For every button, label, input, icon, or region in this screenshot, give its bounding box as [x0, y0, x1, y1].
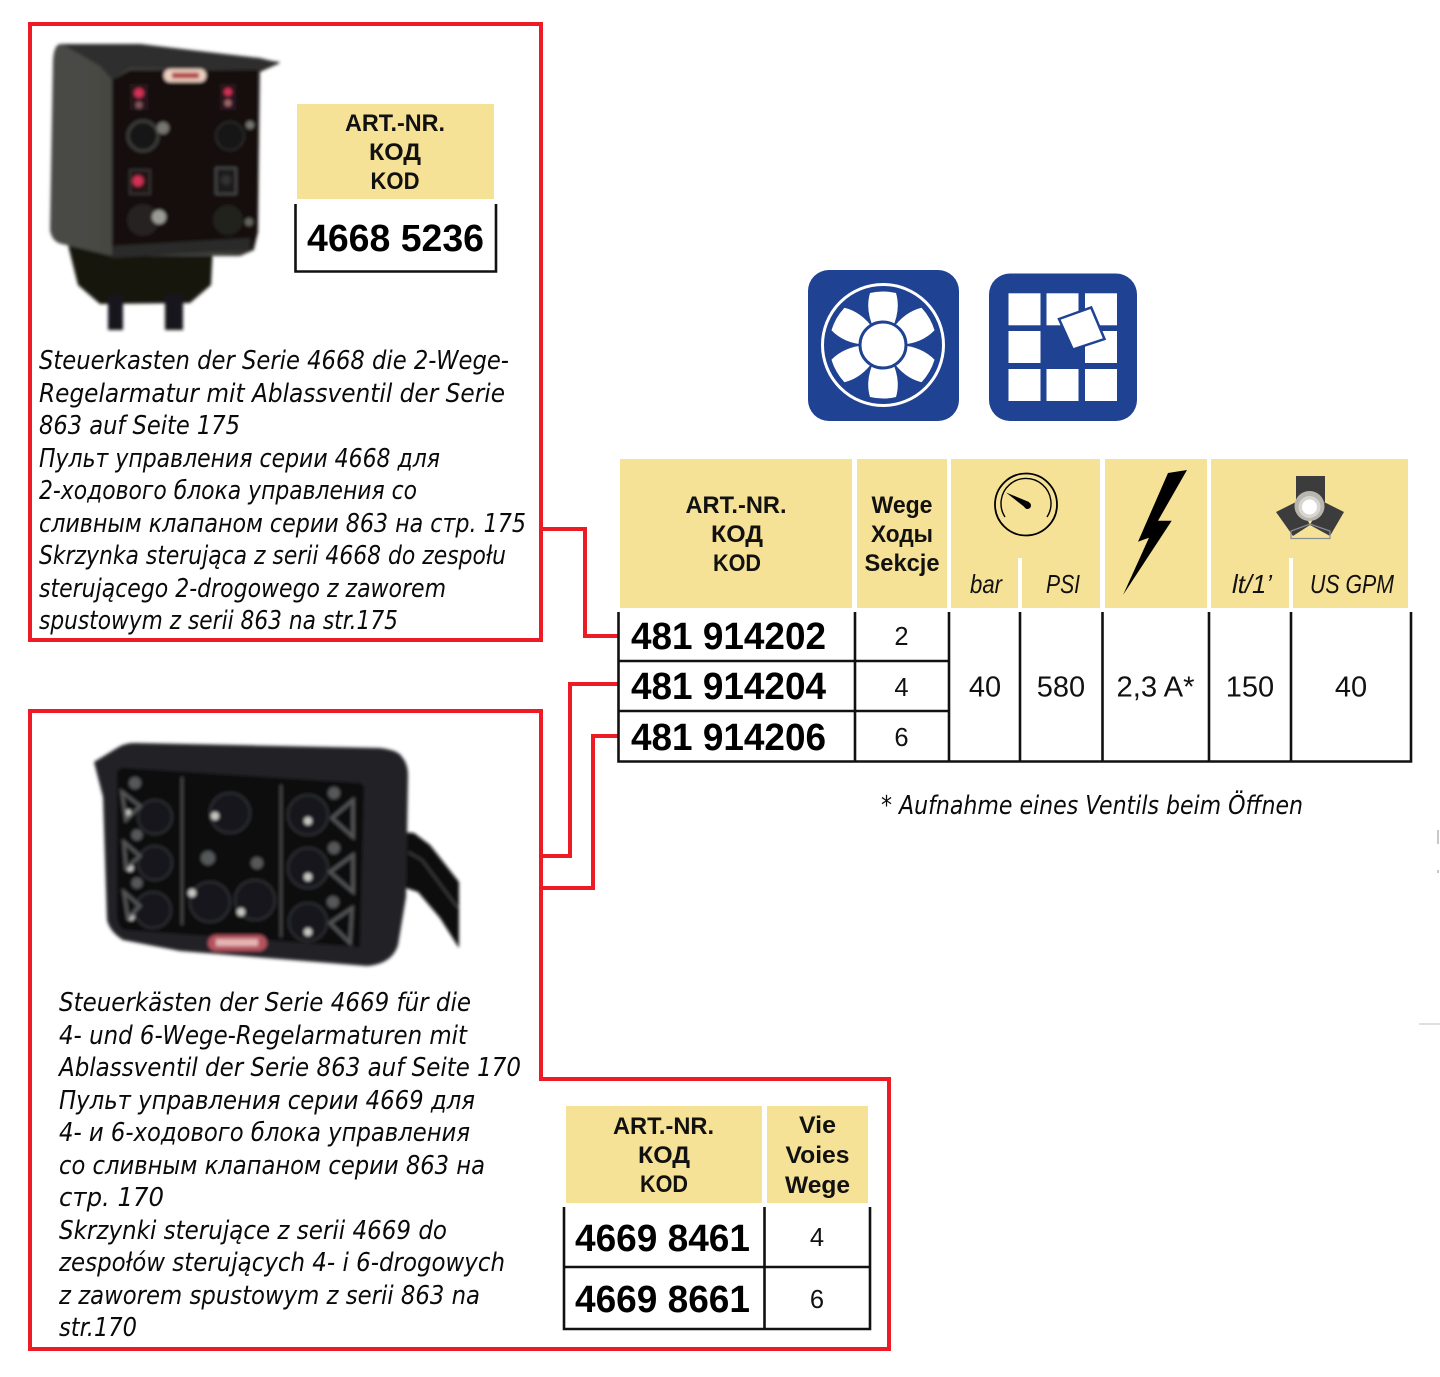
header: pressure: bar [970, 569, 1003, 599]
photo: control box 4669 [94, 743, 459, 966]
row 481 914206: 6 [894, 724, 909, 752]
description 4668 [39, 346, 526, 636]
row 4669 8461: 4669 8461 [575, 1218, 750, 1260]
header: flow [1211, 459, 1408, 608]
header: article code: КОД [638, 1142, 691, 1169]
table: 481 article codes [618, 459, 1411, 762]
header: article code [620, 459, 852, 608]
article code value 4668 [296, 204, 496, 272]
merged values: 580 [1037, 672, 1085, 704]
icon: pump [1276, 476, 1344, 538]
header: ways: Sekcje [864, 550, 940, 577]
header: ways: Vie [799, 1112, 836, 1139]
description 4668: сливным клапаном серии 863 на стр. 175 [39, 509, 526, 539]
description 4668: Steuerkasten der Serie 4668 die 2-Wege- [39, 346, 509, 376]
header: pressure: PSI [1046, 569, 1080, 599]
icon: fan [808, 270, 959, 421]
row 481 914202: 481 914202 [631, 616, 826, 658]
panel border 4669 [30, 711, 889, 1349]
description 4669: со сливным клапаном серии 863 на [59, 1151, 485, 1181]
row 481 914206: 481 914206 [631, 717, 826, 759]
description 4668: sterującego 2-drogowego z zaworem [39, 574, 446, 604]
description 4669: 4- и 6-ходового блока управления [59, 1118, 470, 1148]
merged values: 2,3 A* [1116, 672, 1194, 704]
article code label 4668: КОД [369, 139, 422, 166]
description 4668: Regelarmatur mit Ablassventil der Serie [39, 379, 505, 409]
description 4669: z zaworem spustowym z serii 863 na [58, 1281, 480, 1311]
header: flow: lt/1’ [1232, 569, 1273, 599]
description 4668: 863 auf Seite 175 [39, 411, 240, 441]
article code label 4668 [297, 104, 494, 199]
description 4669: Ablassventil der Serie 863 auf Seite 170 [57, 1053, 521, 1083]
header: ways [767, 1106, 868, 1203]
description 4669 [57, 988, 521, 1343]
icon: pressure gauge [995, 474, 1057, 536]
row 4669 8661: 4669 8661 [575, 1279, 750, 1321]
header: article code [566, 1106, 762, 1203]
article code value 4668: 4668 5236 [307, 218, 484, 260]
header: current [1105, 459, 1207, 608]
header: ways: Wege [872, 492, 932, 519]
table: 4669 article codes [564, 1106, 870, 1329]
footnote: * Aufnahme eines Ventils beim Öffnen [881, 791, 1303, 821]
photo: control box 4668 [50, 44, 280, 330]
description 4668: 2-ходового блока управления со [39, 476, 417, 506]
row 481 914204: 481 914204 [631, 666, 826, 708]
connector: panel 4669 to row 481 914204 [541, 684, 618, 856]
panel border 4668 [30, 24, 541, 640]
article code label 4668: KOD [370, 168, 420, 195]
merged values [969, 672, 1367, 704]
description 4669: 4- und 6-Wege-Regelarmaturen mit [59, 1021, 468, 1051]
icon: lightning bolt [1123, 470, 1187, 595]
row 481 914204: 4 [894, 674, 909, 702]
header: ways: Ходы [871, 521, 933, 548]
merged values: 40 [1335, 672, 1367, 704]
header: ways: Voies [786, 1142, 850, 1169]
icon: valve grid [989, 274, 1137, 421]
description 4668: Пульт управления серии 4668 для [39, 444, 440, 474]
header: ways [857, 459, 947, 608]
description 4668: spustowym z serii 863 na str.175 [39, 606, 398, 636]
table grid [564, 1207, 870, 1329]
header: article code: ART.-NR. [613, 1113, 714, 1140]
panel: control box series 4668 [30, 24, 541, 640]
description 4669: Skrzynki sterujące z serii 4669 do [59, 1216, 447, 1246]
header: article code: KOD [640, 1171, 688, 1198]
description 4669: zespołów sterujących 4- i 6-drogowych [58, 1248, 505, 1278]
description 4669: Пульт управления серии 4669 для [59, 1086, 475, 1116]
row 481 914202: 2 [894, 623, 909, 651]
connector: panel 4669 to row 481 914206 [541, 736, 618, 888]
merged values: 40 [969, 672, 1001, 704]
header: flow: US GPM [1310, 569, 1394, 599]
description 4669: стр. 170 [59, 1183, 164, 1213]
description 4669: Steuerkästen der Serie 4669 für die [59, 988, 471, 1018]
table grid [618, 612, 1411, 762]
merged values: 150 [1226, 672, 1274, 704]
description 4668: Skrzynka sterująca z serii 4668 do zespołu [39, 541, 506, 571]
header: article code: KOD [713, 550, 761, 577]
header: article code: ART.-NR. [686, 492, 786, 519]
panel: control boxes series 4669 [30, 711, 889, 1349]
row 4669 8661: 6 [810, 1286, 824, 1314]
article code label 4668: ART.-NR. [345, 110, 445, 137]
header: article code: КОД [711, 521, 764, 548]
description 4669: str.170 [59, 1313, 137, 1343]
row 4669 8461: 4 [810, 1224, 824, 1252]
header: ways: Wege [785, 1172, 850, 1199]
connector: panel 4668 to row 481 914202 [541, 529, 618, 636]
header: pressure [951, 459, 1100, 608]
